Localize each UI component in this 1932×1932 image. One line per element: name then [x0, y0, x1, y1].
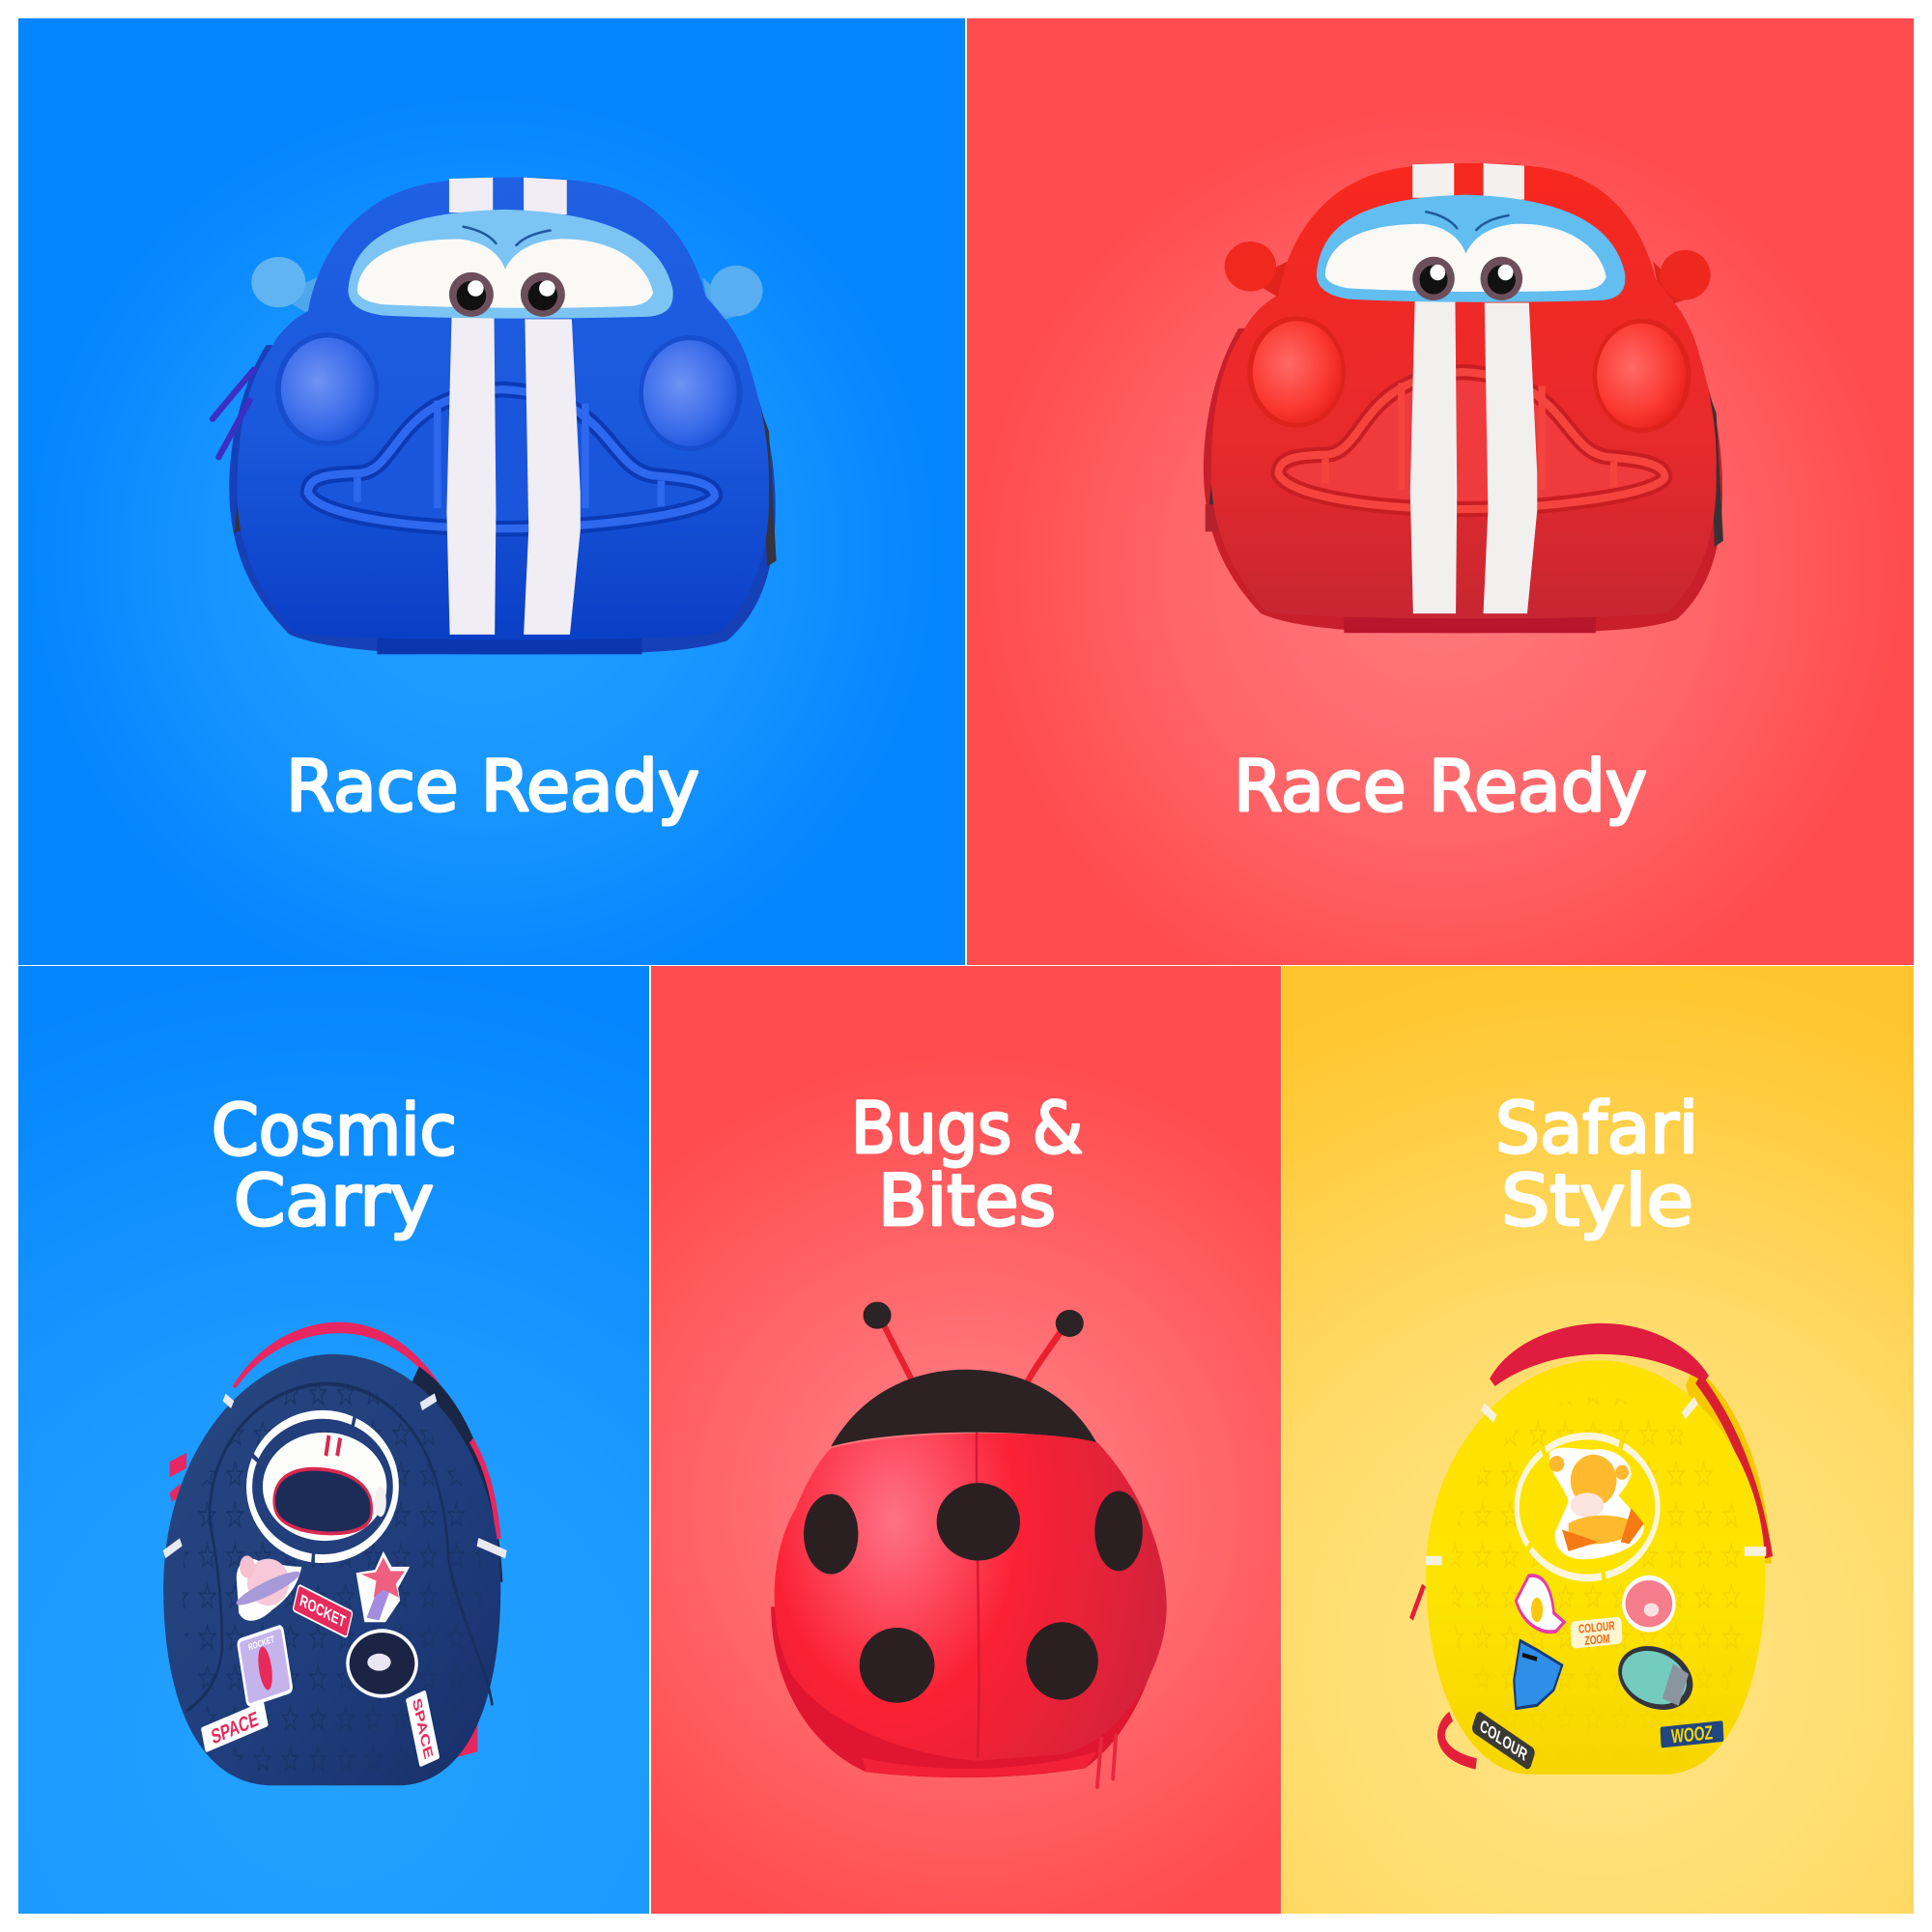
grille outline — [1278, 372, 1664, 509]
windscreen frame — [1317, 195, 1625, 302]
head — [831, 1370, 1097, 1446]
hood stripe right — [524, 319, 581, 635]
spot 5 — [1026, 1622, 1098, 1700]
lamp right — [643, 340, 737, 446]
spot 2 — [937, 1483, 1020, 1560]
eye left — [1412, 257, 1455, 300]
title — [212, 1090, 457, 1242]
clip marks — [164, 1397, 506, 1554]
sticker: rocket card: ROCKET — [247, 1634, 275, 1653]
bottom strap — [377, 635, 642, 654]
panel: cosmic carry — [18, 966, 649, 1914]
sticker: ufo — [235, 1555, 301, 1621]
lamp rim left — [1247, 316, 1346, 428]
antenna stems — [885, 1326, 1060, 1386]
sticker: space right: SPACE — [410, 1696, 436, 1762]
side tie — [1411, 1585, 1424, 1619]
title: Bites — [878, 1160, 1056, 1242]
sticker: rocket tag: ROCKET — [298, 1592, 347, 1632]
panel background — [967, 18, 1914, 965]
sticker: colour zoom — [1571, 1616, 1623, 1650]
side tab — [1206, 504, 1218, 531]
rear straps — [170, 1453, 477, 1758]
eyebrows — [1426, 212, 1509, 230]
zipper pulls — [213, 370, 254, 457]
zipper base — [1204, 328, 1722, 633]
red car backpack — [1204, 163, 1723, 633]
lamp rim right — [639, 335, 743, 451]
sticker: moon badge — [346, 1629, 418, 1698]
sticker: space left — [201, 1701, 269, 1752]
title: Race Ready — [1234, 746, 1647, 828]
title: Style — [1501, 1160, 1693, 1242]
mirror right — [710, 266, 763, 316]
sticker: colour zoom: ZOOM — [1584, 1633, 1610, 1648]
ladybug backpack — [771, 1302, 1167, 1787]
title: Carry — [234, 1160, 434, 1242]
side pockets — [234, 394, 259, 533]
roof stripes — [1412, 163, 1524, 200]
clip marks — [1426, 1401, 1766, 1560]
sticker: chicken — [1516, 1576, 1564, 1632]
spot 4 — [860, 1628, 934, 1703]
fin right — [702, 277, 743, 324]
sticker: wooz tag — [1661, 1719, 1724, 1748]
grille outline shadow — [1278, 372, 1664, 509]
panel background — [1282, 966, 1914, 1914]
side zipper — [471, 1440, 498, 1539]
sticker: star — [356, 1551, 410, 1622]
grille outline — [308, 389, 715, 528]
lamp rim right — [1593, 319, 1691, 433]
grille bars — [1325, 383, 1614, 489]
antenna tip right — [1056, 1310, 1084, 1337]
eye right — [1480, 257, 1522, 300]
bottom strap — [1344, 613, 1596, 633]
mirror right — [1661, 250, 1711, 299]
base band — [862, 1751, 1097, 1777]
sticker: wooz tag: WOOZ — [1670, 1720, 1714, 1747]
sticker: colour zoom: COLOUR — [1578, 1619, 1615, 1636]
lamp rim left — [275, 332, 379, 446]
shell — [775, 1434, 1167, 1761]
panel: red race ready — [967, 18, 1914, 965]
windscreen frame — [348, 210, 673, 319]
lamp right — [1597, 324, 1686, 428]
star texture — [1451, 1397, 1745, 1764]
grille centre shade — [1281, 372, 1659, 507]
sticker: space left: SPACE — [210, 1706, 260, 1748]
spot 1 — [804, 1494, 858, 1575]
star texture — [183, 1385, 482, 1776]
fin left — [277, 277, 317, 316]
title: Safari — [1495, 1088, 1698, 1170]
zipper base — [229, 345, 776, 654]
astronaut backpack — [163, 1322, 506, 1785]
sticker: rocket card — [238, 1626, 292, 1706]
ring — [1517, 1436, 1658, 1577]
eyebrows — [464, 227, 551, 245]
panel background — [651, 966, 1281, 1914]
hood stripe left — [1410, 301, 1457, 613]
sticker: colour tag: COLOUR — [1478, 1717, 1529, 1766]
grille outline shadow — [308, 389, 715, 528]
lamp left — [1253, 321, 1342, 423]
rear straps — [1441, 1717, 1476, 1764]
grille bars — [357, 401, 661, 508]
antenna tip left — [864, 1302, 892, 1329]
shell — [1211, 163, 1717, 618]
safari backpack — [1411, 1323, 1772, 1775]
title: Bugs & — [851, 1088, 1083, 1170]
fin right — [1653, 262, 1691, 307]
title — [851, 1088, 1083, 1242]
handle — [1490, 1323, 1709, 1386]
fin left — [1249, 262, 1288, 299]
underside — [771, 1606, 1167, 1777]
panel background — [18, 18, 965, 965]
side zipper — [1698, 1378, 1769, 1557]
eye right — [521, 272, 565, 317]
windscreen eyes — [357, 239, 653, 308]
windscreen eyes — [1325, 224, 1606, 292]
lamp left — [281, 338, 375, 441]
rear side — [411, 1367, 502, 1582]
handle — [233, 1322, 442, 1391]
mirror left — [1225, 242, 1276, 292]
title: Cosmic — [212, 1090, 457, 1172]
panel: bugs and bites — [651, 966, 1281, 1914]
helmet — [263, 1433, 386, 1541]
sticker: rocket tag — [293, 1584, 353, 1637]
visor — [274, 1469, 372, 1533]
blue car backpack — [213, 178, 777, 654]
roof stripes — [449, 178, 567, 214]
zipper pulls — [1097, 1736, 1116, 1787]
helmet mark — [326, 1435, 340, 1456]
grille centre shade — [311, 389, 708, 526]
sticker: elephant — [1615, 1638, 1696, 1718]
shell — [163, 1354, 500, 1785]
side pockets — [1208, 377, 1232, 513]
helmet ear — [375, 1488, 386, 1517]
spot 3 — [1094, 1491, 1143, 1571]
title — [1495, 1088, 1698, 1242]
shell — [1426, 1360, 1765, 1775]
sticker: pig — [1622, 1576, 1676, 1632]
panel: blue race ready — [18, 18, 965, 965]
sticker: giraffe — [1549, 1448, 1644, 1559]
shell — [238, 178, 769, 639]
title: Race Ready — [286, 746, 699, 828]
panel background — [18, 966, 649, 1914]
sticker: hedgehog — [1514, 1640, 1562, 1709]
helmet ring — [249, 1414, 396, 1559]
mirror left — [251, 257, 305, 307]
rear shell — [1686, 1367, 1772, 1564]
hood stripe right — [1484, 302, 1537, 613]
hood stripe left — [446, 317, 496, 635]
panel: safari style — [1282, 966, 1914, 1914]
centre seam — [977, 1433, 979, 1758]
inner contour — [186, 1383, 493, 1712]
sticker: colour tag — [1471, 1710, 1536, 1771]
sticker: space right — [406, 1690, 440, 1767]
eye left — [449, 272, 494, 317]
